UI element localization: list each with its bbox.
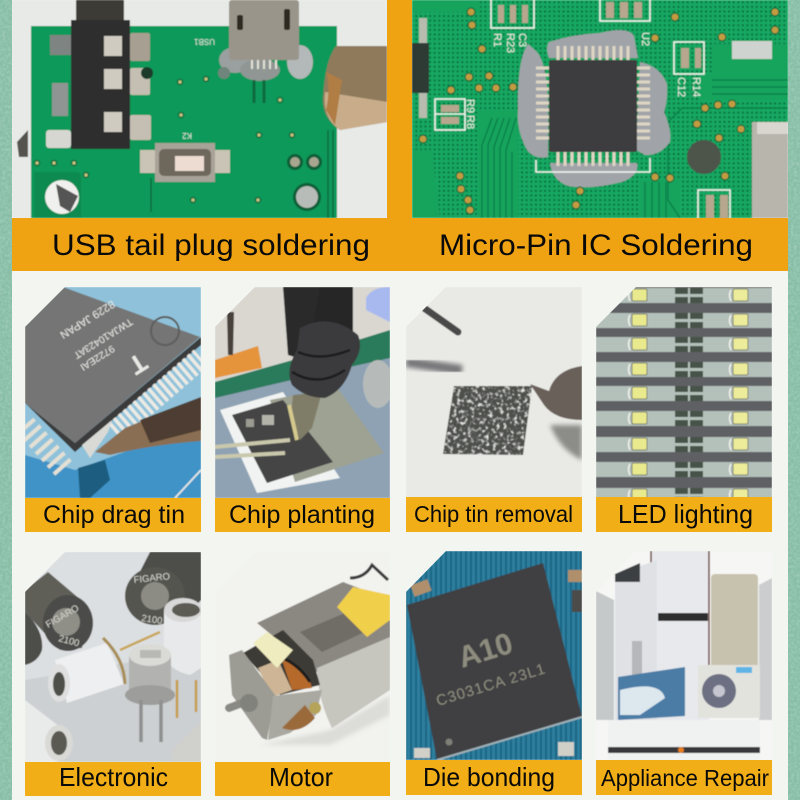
silkscreen reference designators: C12 <box>675 77 687 97</box>
caption: LED lighting <box>618 499 753 529</box>
iron tip <box>530 366 582 420</box>
electrolytic capacitor <box>687 140 721 174</box>
FIGARO markings: 2100 <box>57 633 80 649</box>
photo: LED strips <box>596 287 772 503</box>
soldering iron tip <box>323 46 387 130</box>
orange frame and caption bar <box>12 0 788 271</box>
caption: Die bonding <box>423 762 555 792</box>
iron tip <box>94 421 201 456</box>
chip legs left side <box>25 425 65 470</box>
mounting holes <box>34 154 322 218</box>
tweezers <box>215 440 290 457</box>
chip marking: C3031CA 23L1 <box>434 660 548 710</box>
panel: chip tin removal <box>406 287 582 532</box>
silkscreen reference designators <box>464 32 702 129</box>
label bar <box>215 498 390 532</box>
chip marking: T <box>123 347 153 381</box>
dark sensor far left <box>25 612 42 665</box>
silkscreen boxes <box>435 0 730 220</box>
stray part at board edge <box>17 130 28 157</box>
outdoor air conditioner unit <box>698 665 760 718</box>
beige coil former <box>258 660 292 697</box>
chip marking: 8229 JAPAN <box>58 297 117 341</box>
caption: Chip drag tin <box>43 501 185 529</box>
silkscreen reference designators: R1 <box>491 33 503 47</box>
tin covered chip <box>440 384 535 458</box>
solid copper zones <box>412 0 788 218</box>
lower left sensor <box>25 700 69 762</box>
photo: hot air gun over stencil <box>215 287 393 498</box>
label bar <box>406 760 582 795</box>
silkscreen reference designators: U2 <box>639 32 651 46</box>
gold vias <box>419 8 779 214</box>
copper windings <box>282 660 312 690</box>
silver shield connector <box>752 122 788 218</box>
caption: Motor <box>269 762 333 792</box>
television <box>618 667 685 720</box>
chip top surface <box>25 287 200 443</box>
silkscreen reference designators: R14 <box>690 77 702 97</box>
panel: die bonding <box>406 551 582 795</box>
label bar <box>215 762 390 796</box>
label bar <box>406 497 582 532</box>
blue glove <box>366 287 390 322</box>
refrigerator <box>651 551 709 721</box>
motor housing top <box>257 582 390 672</box>
photo: home appliances <box>596 551 772 760</box>
FIGARO markings <box>44 571 171 649</box>
solder joint <box>82 420 112 458</box>
panel: motor <box>215 552 390 796</box>
FIGARO markings: FIGARO <box>133 571 171 586</box>
FIGARO markings: FIGARO <box>44 603 81 631</box>
copper traces <box>482 80 788 218</box>
white sensor right <box>164 610 201 675</box>
left green border strip <box>0 0 12 800</box>
metal transistor can <box>129 650 171 702</box>
air conditioner tower <box>615 560 657 720</box>
panel: appliance repair <box>596 551 772 795</box>
photo: electric motor <box>215 552 390 762</box>
silver stencil <box>270 387 384 482</box>
label bar <box>25 762 201 796</box>
end plate <box>229 650 275 740</box>
FIGARO markings: 2100 <box>141 613 163 627</box>
tweezer tip <box>424 308 458 332</box>
photo: A10 chip on blue board <box>406 551 582 760</box>
IC package <box>549 60 637 152</box>
iron shadow <box>550 425 582 460</box>
IC pins <box>536 46 650 166</box>
caption: USB tail plug soldering: USB tail plug soldering <box>52 229 370 262</box>
water heater <box>711 574 758 674</box>
washer side panels <box>596 591 614 720</box>
panel: chip planting <box>215 287 393 532</box>
interior cavity <box>243 630 320 695</box>
right green border strip <box>788 0 800 800</box>
audio jack <box>46 0 153 149</box>
light yellow connector <box>253 632 293 668</box>
chip legs right side <box>115 358 201 432</box>
tact switch K2 <box>140 143 230 182</box>
tweezer shadow <box>406 362 462 370</box>
photo: gas sensors <box>25 552 202 762</box>
dark chip area <box>232 400 333 483</box>
label bar <box>25 498 201 532</box>
chip marking <box>434 627 548 710</box>
photo: chip on white tissue <box>406 287 582 498</box>
caption: Appliance Repair <box>601 765 769 791</box>
silkscreen reference designators: R23 <box>504 33 516 53</box>
caption: Chip tin removal <box>414 501 573 527</box>
chip marking: A10 <box>454 627 517 675</box>
chip marking: TWJA10423AT <box>72 315 134 360</box>
motor housing side <box>317 637 390 728</box>
caption: Chip planting <box>229 501 375 529</box>
white sensor center <box>55 643 124 703</box>
chip marking: 9722EAI <box>78 342 116 372</box>
caption: Electronic <box>59 762 168 792</box>
label bar <box>596 760 772 795</box>
shaft <box>229 700 250 708</box>
small SMD parts <box>441 2 728 219</box>
solder paste blobs around IC <box>518 30 670 187</box>
panel: Micro-Pin IC soldering photo <box>412 0 788 220</box>
hot air nozzle <box>291 392 322 440</box>
chip marking <box>60 300 150 376</box>
black cloth <box>282 287 321 358</box>
yellow capacitor <box>337 587 390 637</box>
label bar <box>596 497 772 532</box>
dark sensor left <box>25 572 88 650</box>
silkscreen label K2: K2 <box>182 131 192 140</box>
silkscreen reference designators: R8 <box>464 115 476 129</box>
orange tag <box>215 346 262 378</box>
green circuit board <box>31 26 337 218</box>
motor shadow <box>260 695 390 745</box>
dark sensor top right <box>128 552 201 625</box>
dark solder shadow <box>78 460 110 498</box>
lower right sensor <box>172 722 201 762</box>
micro USB connector <box>218 0 313 103</box>
heat gun <box>312 287 353 335</box>
panel: LED lighting <box>596 287 772 532</box>
white paper <box>220 392 340 493</box>
panel: electronic <box>25 552 202 796</box>
SMD components <box>410 570 582 758</box>
silkscreen reference designators: C3 <box>516 33 528 47</box>
panel: USB tail plug soldering photo <box>12 0 387 218</box>
silver pad top right <box>732 41 772 59</box>
dark component left <box>412 18 429 118</box>
photo: chip with soldering iron <box>25 287 201 498</box>
wires <box>350 565 388 580</box>
wall split air conditioner <box>608 720 760 760</box>
solder tin <box>363 360 393 408</box>
board vias <box>34 76 294 202</box>
lower bracket <box>268 690 322 740</box>
panel: chip drag tin <box>25 287 201 532</box>
caption: Micro-Pin IC Soldering: Micro-Pin IC Soldering <box>439 229 753 262</box>
silkscreen label USB1: USB1 <box>194 37 215 46</box>
chip package <box>407 563 582 760</box>
silkscreen reference designators: R9 <box>464 99 476 113</box>
